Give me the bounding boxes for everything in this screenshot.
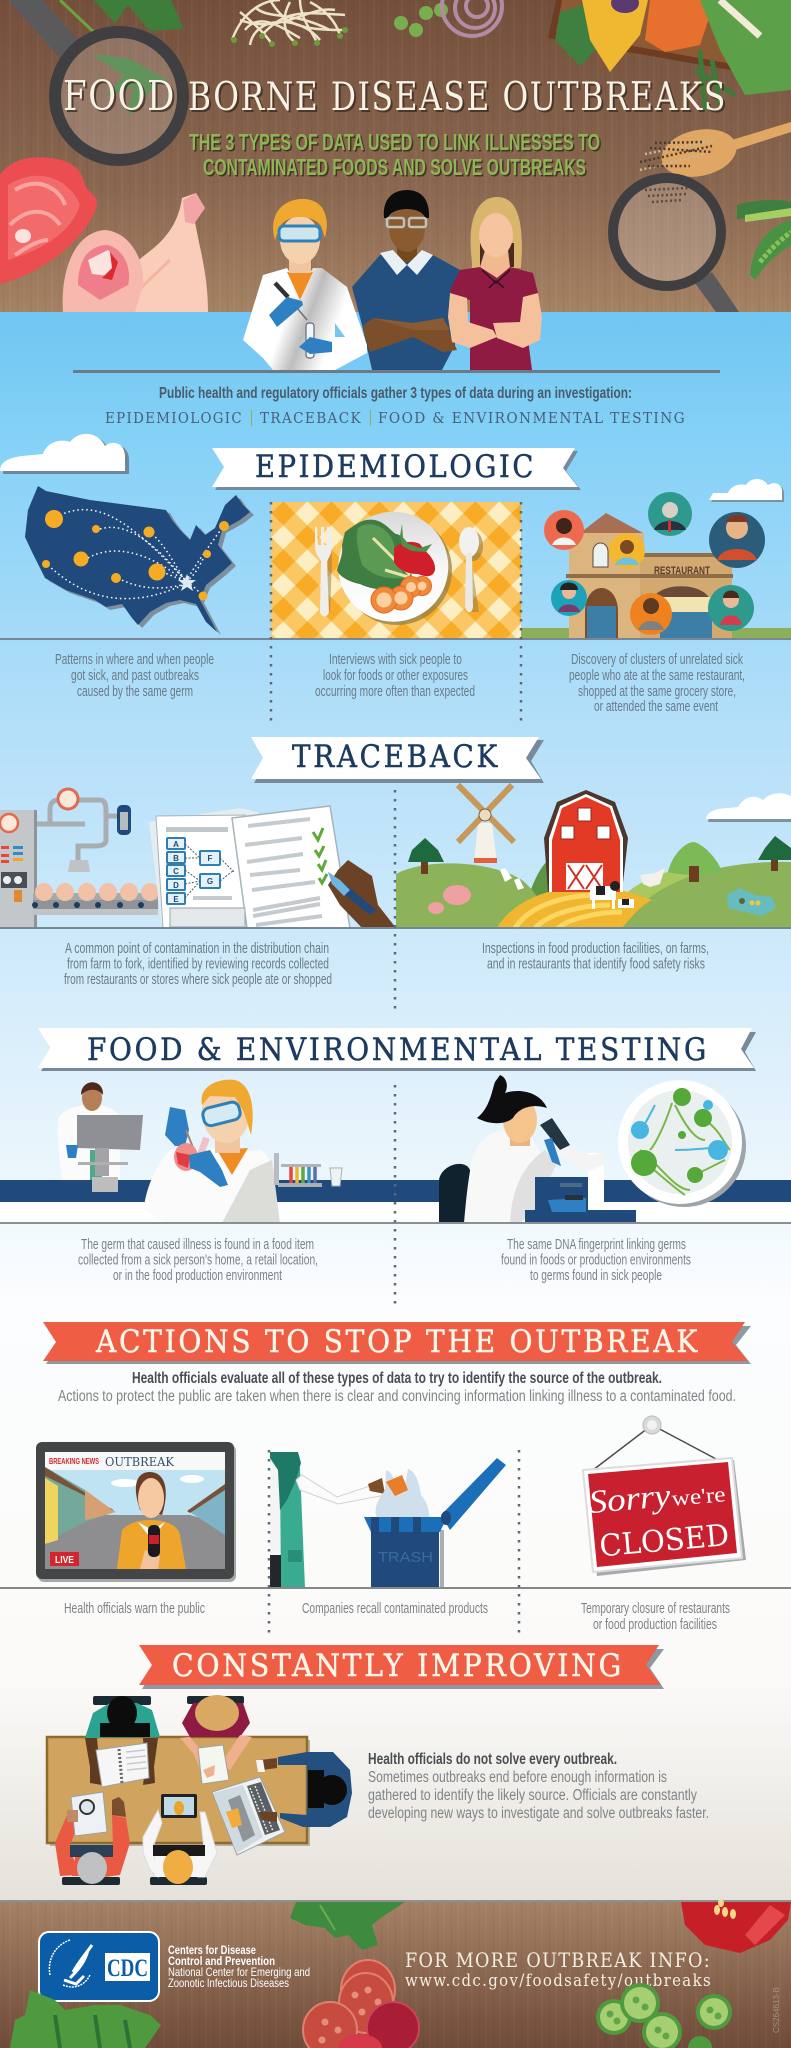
icon: flow chart A-G — [167, 838, 220, 904]
subtitle: CONTAMINATED FOODS AND SOLVE OUTBREAKS — [203, 154, 586, 180]
lab counter — [0, 1180, 791, 1223]
icon: cloud left — [0, 434, 129, 474]
caption: common point of contamination: from farm to fork, identified by reviewing records collected — [67, 956, 329, 972]
text: agency name: Control and Prevention — [168, 1954, 275, 1968]
illustration: TV news report: OUTBREAK — [105, 1455, 175, 1469]
illustration: restaurant with customers: RESTAURANT — [654, 565, 710, 577]
icon: fork — [315, 527, 332, 616]
illustration: records and checklist: C — [173, 867, 179, 876]
text: more info call to action: www.cdc.gov/foodsafety/outbreaks — [405, 1971, 712, 1990]
icon: onion rings — [442, 0, 502, 36]
actions intro text — [58, 1370, 736, 1405]
caption: germ found in food: or in the food production environment — [113, 1268, 282, 1284]
icon: barn — [544, 790, 628, 892]
text: health officials do not solve every outbreak: gathered to identify the likely source. Officials are constantly — [368, 1787, 697, 1804]
icon: laptop — [212, 1777, 285, 1855]
carrots — [371, 576, 432, 613]
caption: patterns: Patterns in where and when people — [55, 652, 214, 668]
caption: inspections: and in restaurants that identify food safety risks — [487, 956, 705, 972]
divider: intro rule — [73, 370, 720, 373]
text: health officials do not solve every outbreak: developing new ways to investigate and solve outbreaks faster. — [368, 1805, 709, 1822]
caption: interviews: Interviews with sick people to — [329, 652, 462, 668]
illustration: closed sign — [583, 1416, 746, 1576]
divider: testing baseline — [0, 1222, 791, 1224]
illustration: records and checklist: G — [207, 877, 213, 886]
figure: bottom-left official — [55, 1792, 130, 1885]
banner: traceback — [251, 737, 544, 783]
illustration: farm scene — [396, 785, 791, 928]
caption: germ found in food: The germ that caused illness is found in a food item — [81, 1237, 314, 1253]
text: publication id: CS264613-B — [772, 1987, 781, 2033]
icon: test tube rack — [274, 1153, 342, 1187]
subtitle: THE 3 TYPES OF DATA USED TO LINK ILLNESSES TO — [189, 129, 600, 155]
icon: peas — [394, 3, 448, 37]
subtitle: THE 3 TYPES OF DATA USED TO LINK ILLNESSES TO — [190, 130, 602, 156]
icon: pond — [727, 888, 776, 916]
data types list: FOOD & ENVIRONMENTAL TESTING — [378, 409, 686, 427]
caption: inspections — [482, 941, 709, 972]
caption: germ found in food — [78, 1237, 318, 1284]
caption: clusters: or attended the same event — [594, 699, 718, 715]
icon: field — [497, 886, 652, 928]
illustration: restaurant with customers — [521, 492, 791, 638]
illustration: closed sign: Sorry — [587, 1478, 672, 1521]
icon: trash can: TRASH — [378, 1549, 433, 1566]
figure: top-left official — [85, 1696, 160, 1787]
caption: patterns: caused by the same germ — [77, 684, 193, 700]
table — [47, 1737, 307, 1843]
intro text: Public health and regulatory officials gather 3 types of data during an investigation: — [159, 385, 632, 402]
illustration: processing machine — [0, 789, 159, 927]
caption: DNA fingerprint: found in foods or production environments — [501, 1252, 691, 1268]
caption: recall products: Companies recall contaminated products — [302, 1601, 488, 1617]
figure: right official at laptop — [256, 1752, 352, 1827]
icon: parsley top — [290, 1902, 405, 1950]
data types list: TRACEBACK — [260, 409, 362, 427]
caption: temporary closure: or food production facilities — [593, 1617, 717, 1633]
caption: warn the public: Health officials warn the public — [64, 1601, 205, 1617]
banner: constantly improving: CONSTANTLY IMPROVING — [172, 1648, 624, 1684]
icon: petri dish with germs — [618, 1080, 746, 1207]
text: agency name: Zoonotic Infectious Diseases — [168, 1976, 289, 1990]
text: more info call to action: FOR MORE OUTBREAK INFO: — [405, 1948, 711, 1972]
data types list — [105, 409, 686, 427]
icon: cloud right — [709, 479, 784, 502]
dotted divider: testing — [394, 1085, 396, 1306]
icon: spoon with seeds — [640, 122, 791, 183]
icon: cucumber slices — [596, 1983, 732, 2048]
illustration: officials around a table — [47, 1695, 352, 1885]
illustration: closed sign: we're — [671, 1481, 726, 1511]
title: FOOD — [63, 72, 176, 120]
icon: sprouts — [232, 0, 345, 45]
caption: patterns: got sick, and past outbreaks — [71, 668, 199, 684]
banner: food and environmental testing: FOOD & ENVIRONMENTAL TESTING — [87, 1032, 709, 1068]
icon: steak — [0, 157, 97, 284]
divider: epidemiologic baseline — [0, 638, 791, 640]
icon: cutting board with peppers — [548, 0, 791, 110]
figure: top official with blonde hair — [180, 1695, 252, 1784]
figure: woman in dress — [448, 197, 542, 370]
caption: DNA fingerprint: The same DNA fingerprint linking germs — [507, 1237, 686, 1253]
caption: germ found in food: collected from a sick person's home, a retail location, — [78, 1252, 318, 1268]
caption: temporary closure — [581, 1601, 730, 1633]
icon: left magnifier — [55, 32, 183, 160]
icon: US map with outbreak dots — [25, 486, 254, 635]
icon: microscope — [525, 1118, 636, 1222]
caption: DNA fingerprint: to germs found in sick people — [530, 1268, 662, 1284]
icon: plastic bag — [376, 1469, 429, 1520]
figure: scientist in lab coat — [243, 199, 367, 370]
icon: left magnifier handle — [8, 0, 80, 60]
conveyor belt — [32, 883, 159, 915]
panel: plate on gingham — [271, 502, 521, 638]
illustration: records and checklist: D — [173, 881, 179, 890]
caption: clusters — [569, 652, 745, 715]
icon: farm animals — [428, 868, 665, 914]
illustration: records and checklist — [149, 806, 396, 928]
icon: trash can — [364, 1458, 506, 1588]
illustration: TV news report: LIVE — [55, 1555, 74, 1566]
illustration: TV news report: BREAKING NEWS — [49, 1457, 99, 1466]
icon: spoon — [459, 527, 483, 612]
text: agency name — [168, 1943, 310, 1990]
illustration: records and checklist: B — [173, 854, 179, 863]
subtitle: CONTAMINATED FOODS AND SOLVE OUTBREAKS — [204, 156, 588, 182]
caption: inspections: Inspections in food production facilities, on farms, — [482, 941, 709, 957]
text: health officials do not solve every outbreak — [368, 1751, 709, 1822]
banner: actions to stop the outbreak: ACTIONS TO STOP THE OUTBREAK — [95, 1324, 700, 1360]
dotted divider: traceback — [394, 790, 396, 1012]
dotted divider: actions left — [268, 1450, 270, 1634]
text: health officials do not solve every outbreak: Health officials do not solve every outbreak. — [368, 1751, 617, 1768]
text: more info call to action — [405, 1948, 712, 1990]
panel: footer — [0, 1899, 791, 2048]
tomato — [394, 542, 435, 576]
illustration: scientist at microscope — [439, 1075, 746, 1223]
icon: ham — [63, 230, 143, 312]
illustration: records and checklist: A — [173, 840, 179, 849]
icon: customers — [544, 492, 765, 635]
icon: drumstick — [112, 193, 208, 312]
caption: patterns — [55, 652, 214, 700]
figure: man in sweater — [352, 190, 460, 370]
panel: header — [0, 0, 791, 312]
banner: epidemiologic: EPIDEMIOLOGIC — [255, 449, 536, 485]
figure: bottom official with tablet — [143, 1794, 217, 1885]
icon: pea pods — [737, 200, 791, 280]
caption: interviews — [315, 652, 475, 700]
caption: common point of contamination: A common point of contamination in the distribution chain — [65, 941, 329, 957]
icon: hand with pen — [328, 860, 396, 928]
dotted divider: epidemiologic left — [270, 502, 272, 722]
data types list: EPIDEMIOLOGIC — [105, 409, 243, 427]
salad — [337, 520, 412, 590]
illustration: three investigators — [243, 190, 542, 370]
icon: parsley bottom — [10, 1990, 161, 2048]
illustration: lab scientist at monitor — [57, 1082, 143, 1192]
dotted divider: epidemiologic right — [520, 502, 522, 722]
icon: trees — [408, 836, 791, 882]
banner: traceback: TRACEBACK — [292, 739, 500, 775]
illustration: TV news report — [36, 1442, 236, 1582]
icon: carrot tops — [60, 0, 182, 115]
icon: CDC wordmark: CDC — [107, 1955, 148, 1982]
illustration: records and checklist: F — [208, 854, 213, 863]
caption: interviews: occurring more often than expected — [315, 684, 475, 700]
caption: common point of contamination — [64, 941, 332, 988]
icon: tomato — [681, 1899, 791, 1953]
dotted divider: actions right — [518, 1450, 520, 1634]
icon: CDC logo — [39, 1932, 159, 2001]
caption: common point of contamination: from restaurants or stores where sick people ate or shopped — [64, 972, 332, 988]
caption: interviews: look for foods or other exposures — [323, 668, 468, 684]
icon: cloud — [706, 793, 791, 822]
icon: windmill — [458, 785, 514, 863]
illustration: records and checklist: E — [173, 895, 179, 904]
illustration: closed sign: CLOSED — [598, 1518, 731, 1564]
title: FOOD — [65, 74, 178, 122]
caption: DNA fingerprint — [501, 1237, 691, 1284]
divider: traceback baseline — [0, 927, 791, 929]
text: agency name: National Center for Emerging and — [168, 1965, 310, 1979]
icon: salami slices — [303, 1960, 419, 2048]
text: agency name: Centers for Disease — [168, 1943, 256, 1957]
illustration: recall into trash — [270, 1452, 506, 1588]
caption: temporary closure: Temporary closure of restaurants — [581, 1601, 730, 1617]
subtitle — [189, 129, 602, 182]
divider: actions baseline — [0, 1587, 791, 1589]
text: health officials do not solve every outbreak: Sometimes outbreaks end before enough information is — [368, 1769, 667, 1786]
icon: check marks — [313, 828, 327, 883]
illustration: scientist testing food — [144, 1080, 280, 1223]
title — [63, 72, 729, 122]
icon: HHS emblem — [49, 1940, 92, 1987]
icon: right magnifier — [613, 178, 739, 312]
